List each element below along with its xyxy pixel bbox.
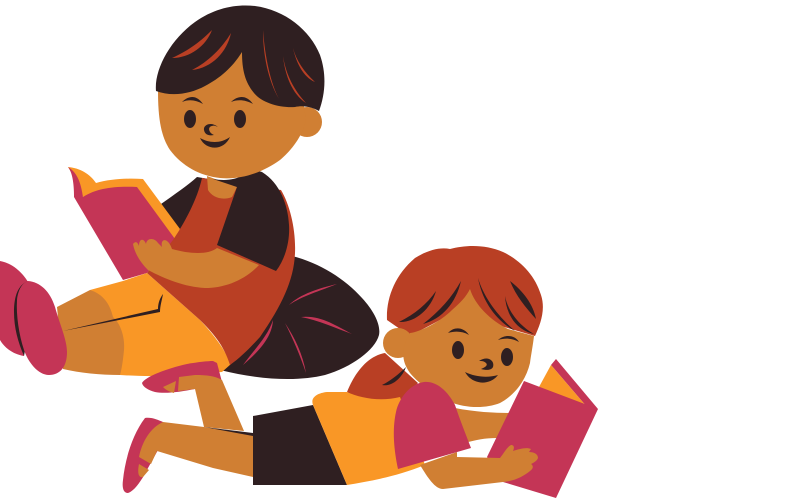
boy open book bbox=[68, 167, 180, 280]
girl ponytail bbox=[347, 353, 418, 402]
boy shoe seam bbox=[14, 281, 28, 356]
girl upper bent leg bbox=[178, 375, 244, 431]
boy shorts bbox=[90, 273, 231, 376]
girl hair bbox=[387, 246, 543, 336]
boy back shoe bbox=[0, 261, 28, 356]
girl near arm and hand bbox=[420, 445, 538, 489]
girl hair strands bbox=[399, 278, 536, 334]
girl ponytail strands bbox=[382, 367, 406, 385]
boy shirt bbox=[147, 178, 295, 365]
boy trouser crease bbox=[63, 294, 163, 331]
girl upper shoe bbox=[142, 361, 222, 393]
boy sleeve bbox=[213, 171, 289, 271]
girl book bbox=[487, 359, 598, 498]
boy front shoe bbox=[17, 281, 67, 375]
girl lower foot patch bbox=[138, 464, 149, 477]
girl shirt bbox=[312, 392, 425, 485]
girl head bbox=[383, 246, 543, 407]
boy face features bbox=[182, 97, 253, 148]
boy figure bbox=[0, 6, 379, 379]
girl far arm bbox=[455, 408, 510, 443]
boy leg bbox=[57, 290, 124, 375]
girl face features bbox=[448, 328, 519, 383]
boy back arm bbox=[161, 177, 215, 240]
girl lower leg bbox=[139, 422, 253, 477]
girl figure bbox=[123, 246, 598, 498]
boy dark trousers mound bbox=[220, 256, 379, 379]
girl ear bbox=[383, 328, 413, 358]
girl shorts bbox=[253, 405, 347, 485]
boy head bbox=[156, 6, 324, 178]
boy hair bbox=[156, 6, 324, 111]
boy arm and hand bbox=[133, 239, 259, 288]
girl lower shoe bbox=[123, 418, 163, 493]
girl leg crease bbox=[204, 427, 253, 436]
girl sleeve bbox=[394, 382, 471, 469]
boy neck bbox=[207, 176, 237, 199]
boy hair highlights bbox=[172, 30, 315, 103]
girl upper foot patch bbox=[163, 381, 176, 393]
girl face bbox=[403, 289, 534, 407]
